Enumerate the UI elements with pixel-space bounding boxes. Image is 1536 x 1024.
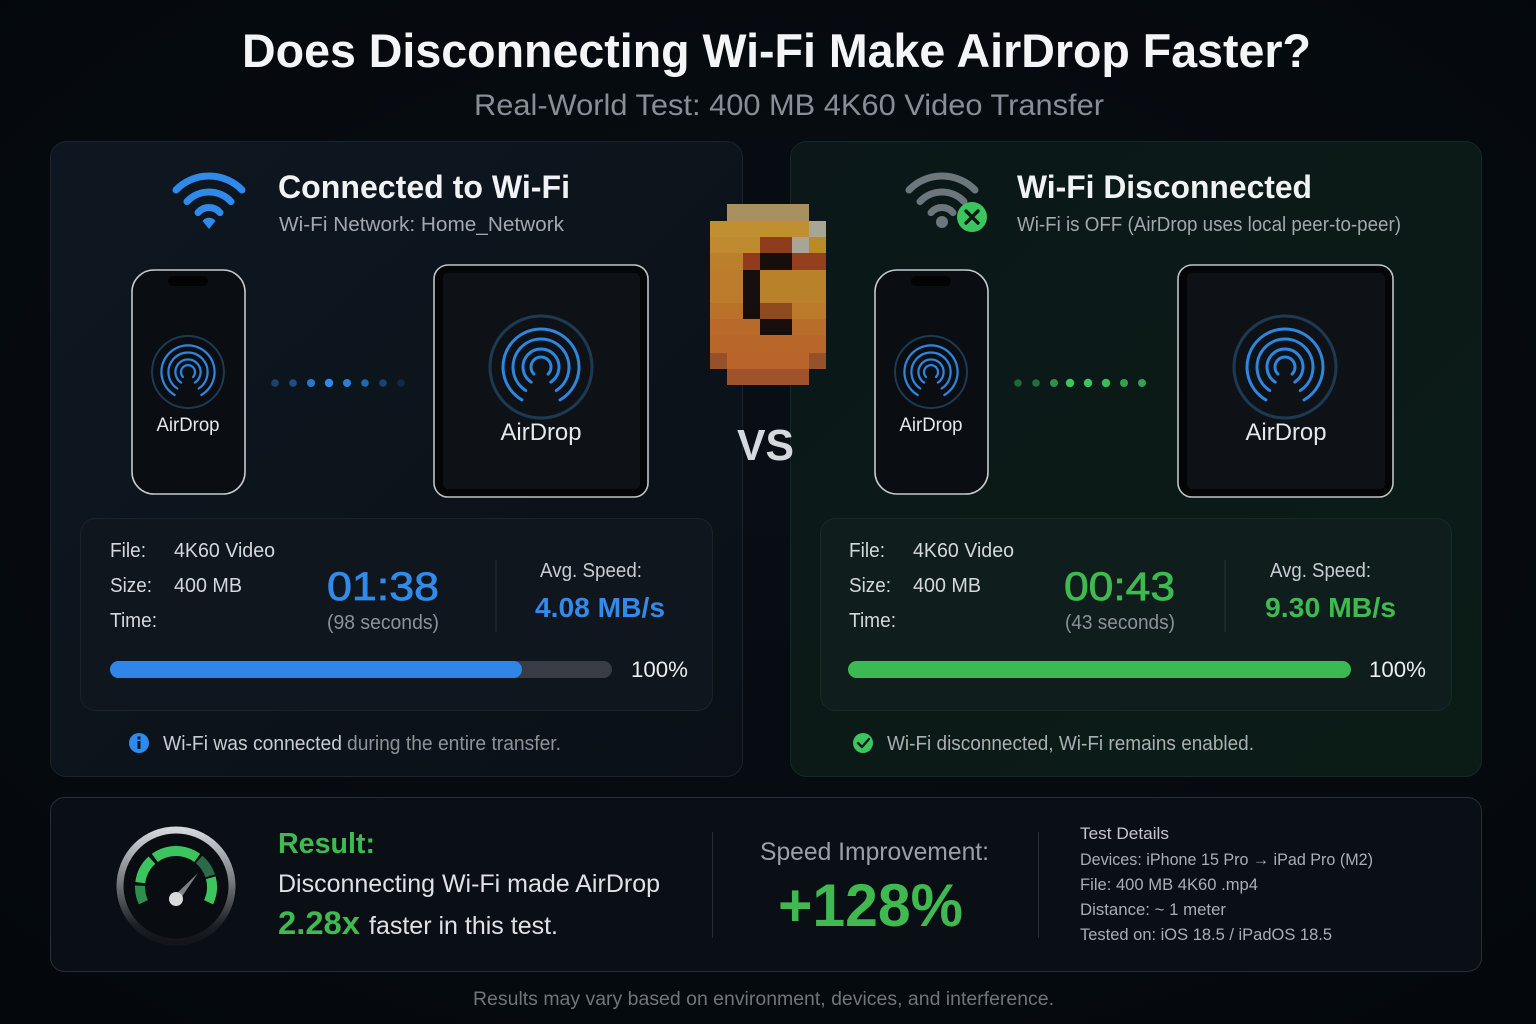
device: iPhone bbox=[132, 270, 245, 494]
heading: disconnected: Wi-Fi Disconnected bbox=[1017, 169, 1312, 205]
transfer dots bbox=[1014, 379, 1146, 387]
file details: Time: bbox=[849, 610, 896, 632]
label: AirDrop bbox=[900, 415, 962, 436]
icon: pixel coin bbox=[710, 204, 826, 385]
file details: 400 MB bbox=[913, 575, 981, 597]
network label: Wi-Fi Network: Home_Network bbox=[279, 214, 565, 236]
device: iPad bbox=[1178, 265, 1393, 497]
seconds: (43 seconds) bbox=[1065, 612, 1175, 634]
subtitle: Real-World Test: 400 MB 4K60 Video Transfer bbox=[474, 89, 1104, 122]
panel: result bbox=[50, 798, 1482, 972]
test details: Devices: iPhone 15 Pro → iPad Pro (M2) bbox=[1080, 850, 1373, 869]
Wi-Fi off label: Wi-Fi is OFF (AirDrop uses local peer-to-peer) bbox=[1017, 214, 1401, 236]
average speed label: Avg. Speed: bbox=[1270, 560, 1371, 582]
icon: AirDrop tablet bbox=[490, 316, 592, 418]
label: AirDrop bbox=[156, 415, 220, 436]
icon: Wi-Fi off bbox=[909, 176, 987, 232]
icon: Wi-Fi blue bbox=[176, 176, 242, 229]
test details bbox=[1080, 824, 1373, 944]
test details: File: 400 MB 4K60 .mp4 bbox=[1080, 875, 1258, 894]
progress bar bbox=[848, 661, 1351, 678]
footer note: Results may vary based on environment, devices, and interference. bbox=[473, 989, 1054, 1010]
average speed value: 9.30 MB/s bbox=[1265, 592, 1396, 623]
icon: AirDrop tablet bbox=[1234, 316, 1336, 418]
icon: check bbox=[853, 733, 873, 753]
file details bbox=[849, 540, 1014, 632]
file details: Size: bbox=[849, 575, 891, 597]
device: iPhone bbox=[875, 270, 988, 494]
result text: Disconnecting Wi-Fi made AirDrop bbox=[278, 870, 660, 898]
file details: 400 MB bbox=[174, 575, 242, 597]
transfer dots bbox=[271, 379, 405, 387]
heading: connected: Connected to Wi-Fi bbox=[278, 169, 570, 205]
result text: 2.28x bbox=[278, 905, 360, 941]
stats card bbox=[80, 518, 712, 710]
speed improvement bbox=[760, 838, 989, 939]
icon: AirDrop phone bbox=[895, 336, 967, 408]
progress bar bbox=[110, 661, 612, 678]
panel: connected to Wi-Fi bbox=[50, 142, 742, 776]
percent: 100% bbox=[631, 657, 688, 682]
file details: Size: bbox=[110, 575, 152, 597]
icon: AirDrop phone bbox=[152, 336, 224, 408]
test details: Tested on: iOS 18.5 / iPadOS 18.5 bbox=[1080, 925, 1332, 944]
label: AirDrop bbox=[1246, 419, 1326, 446]
file details bbox=[110, 540, 275, 632]
percent: 100% bbox=[1369, 657, 1426, 682]
file details: File: bbox=[849, 540, 885, 562]
result text: faster in this test. bbox=[369, 912, 558, 940]
VS label: VS bbox=[737, 421, 794, 470]
file details: 4K60 Video bbox=[174, 540, 275, 562]
file details: File: bbox=[110, 540, 146, 562]
test details: Test Details bbox=[1080, 824, 1169, 843]
icon: info bbox=[129, 733, 149, 753]
icon: speed gauge bbox=[120, 830, 232, 942]
stats card bbox=[820, 518, 1452, 710]
file details: Time: bbox=[110, 610, 157, 632]
note: Wi-Fi was connected bbox=[163, 733, 342, 755]
time value: 00:43 bbox=[1064, 565, 1175, 609]
time value: 01:38 bbox=[327, 565, 439, 609]
result text bbox=[278, 828, 660, 941]
speed improvement: +128% bbox=[778, 872, 963, 939]
panel: Wi-Fi disconnected bbox=[790, 142, 1482, 776]
device: iPad bbox=[434, 265, 648, 497]
note: during the entire transfer. bbox=[347, 733, 561, 755]
speed improvement: Speed Improvement: bbox=[760, 838, 989, 866]
title: Does Disconnecting Wi-Fi Make AirDrop Faster? bbox=[242, 24, 1311, 77]
average speed value: 4.08 MB/s bbox=[535, 592, 665, 623]
note: Wi-Fi disconnected, Wi-Fi remains enabled. bbox=[887, 733, 1254, 755]
test details: Distance: ~ 1 meter bbox=[1080, 900, 1226, 919]
file details: 4K60 Video bbox=[913, 540, 1014, 562]
label: AirDrop bbox=[500, 419, 582, 446]
seconds: (98 seconds) bbox=[327, 612, 439, 634]
note bbox=[129, 733, 561, 755]
result text: Result: bbox=[278, 828, 375, 860]
average speed label: Avg. Speed: bbox=[540, 560, 642, 582]
